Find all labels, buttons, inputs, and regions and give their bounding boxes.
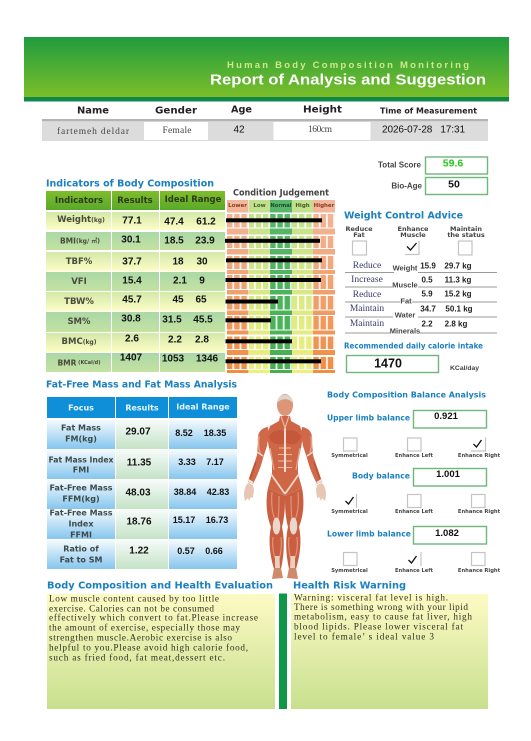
table: indicators of body composition: BMR (KCal/d) (57, 358, 101, 368)
table: fat-free mass and fat mass analysis: 38.84 (174, 487, 196, 497)
patient information table: Time of Measurement (380, 106, 477, 116)
recommended daily calorie intake (344, 342, 483, 372)
table: fat-free mass and fat mass analysis: Results (125, 404, 159, 412)
weight control targets: 15.2 kg (444, 290, 472, 298)
balance: upper limb: Enhance Left (395, 453, 434, 459)
table: indicators of body composition: 1407 (120, 352, 143, 364)
table: fat-free mass and fat mass analysis: 16.73 (206, 515, 228, 525)
weight control options: Fat (353, 231, 365, 239)
patient information table: 160cm (308, 125, 333, 135)
chart: condition judgement bars: Higher (314, 203, 335, 209)
table: indicators of body composition: 2.8 (195, 334, 209, 346)
table: fat-free mass and fat mass analysis: 29.07 (125, 426, 151, 438)
table: indicators of body composition: 45.7 (122, 294, 142, 306)
table: indicators of body composition: 18.5 (164, 236, 184, 246)
table: indicators of body composition: 2.1 (173, 276, 187, 286)
patient information table: fartemeh deldar (57, 126, 130, 137)
table: fat-free mass and fat mass analysis: 0.66 (205, 546, 223, 556)
balance: upper limb: 0.921 (434, 411, 459, 422)
table: indicators of body composition: BMC(kg) (62, 337, 97, 347)
panel: body composition evaluation text: the amount of exercise, especially those may (49, 622, 240, 632)
chart: condition judgement bars: Low (253, 203, 266, 209)
balance: lower limb: Lower limb balance (327, 530, 411, 538)
chart: condition judgement bars: Normal (270, 203, 292, 209)
table: indicators of body composition: 65 (195, 294, 207, 306)
table: fat-free mass and fat mass analysis: 18.76 (126, 516, 152, 528)
table: indicators of body composition: 1053 (162, 354, 185, 364)
patient information table: Gender (155, 106, 197, 116)
table: indicators of body composition: Weight(kg) (57, 215, 105, 225)
heading: indicators of body composition: Indicators of Body Composition (46, 178, 214, 190)
panel: health risk warning text: Warning: visceral fat level is high. (294, 592, 448, 602)
balance: lower limb (327, 526, 501, 574)
recommended daily calorie intake: Recommended daily calorie intake (344, 342, 483, 350)
table: indicators of body composition: 45 (172, 294, 184, 306)
table: fat-free mass and fat mass analysis: 15.17 (173, 515, 195, 525)
patient information table (42, 104, 488, 141)
panel: body composition evaluation text: strengthen muscle.Aerobic exercise is also (49, 632, 232, 642)
panel: body composition evaluation text: exercise. Calories can not be consumed (49, 604, 214, 614)
balance: lower limb: 1.082 (435, 528, 459, 539)
recommended daily calorie intake: KCal/day (450, 365, 479, 372)
table: indicators of body composition: 18 (172, 256, 184, 268)
table: indicators of body composition: 47.4 (164, 216, 184, 228)
table: indicators of body composition (46, 191, 225, 372)
table: fat-free mass and fat mass analysis: Ideal Range (176, 402, 230, 412)
balance: upper limb (327, 410, 501, 459)
table: fat-free mass and fat mass analysis: Focus (68, 404, 94, 412)
weight control targets: 50.1 kg (445, 304, 473, 314)
table: fat-free mass and fat mass analysis: 48.03 (125, 488, 151, 498)
table: indicators of body composition: 77.1 (122, 216, 142, 226)
balance: lower limb: Symmetrical (331, 568, 368, 574)
patient information table: Name (77, 106, 109, 116)
panel: body composition evaluation text: Low muscle content caused by too little (49, 594, 219, 604)
patient information table: 2026-07-28 17:31 (382, 124, 465, 136)
table: fat-free mass and fat mass analysis: FMI (73, 466, 89, 474)
table: fat-free mass and fat mass analysis: Fat Mass (61, 424, 101, 432)
table: fat-free mass and fat mass analysis: 0.57 (177, 546, 195, 556)
total score and bio-age: 59.6 (443, 158, 463, 170)
balance: lower limb: Enhance Right (458, 568, 501, 574)
table: fat-free mass and fat mass analysis: 18.35 (204, 428, 226, 438)
weight control targets: 2.2 (421, 320, 433, 328)
panel: health risk warning text: level to female’ s ideal value 3 (294, 632, 434, 642)
table: fat-free mass and fat mass analysis: Index (69, 520, 94, 528)
chart: condition judgement bars (225, 200, 335, 373)
weight control targets: Weight (393, 264, 418, 272)
table: indicators of body composition: Ideal Range (165, 195, 222, 205)
weight control options: the status (447, 231, 485, 239)
patient information table: Age (231, 104, 252, 116)
table: indicators of body composition: 30.8 (121, 314, 141, 324)
table: fat-free mass and fat mass analysis: Fat-Free Mass (50, 508, 113, 518)
table: fat-free mass and fat mass analysis: 3.33 (178, 457, 196, 467)
table: indicators of body composition: 2.6 (125, 334, 139, 344)
weight control options (346, 225, 485, 255)
table: indicators of body composition: 31.5 (162, 314, 182, 326)
patient information table: 42 (233, 124, 245, 136)
total score and bio-age: Bio-Age (391, 182, 423, 190)
weight control targets: Reduce (353, 290, 381, 300)
balance: body: Enhance Left (395, 509, 434, 515)
table: indicators of body composition: Indicators (55, 196, 103, 206)
table: indicators of body composition: 23.9 (195, 236, 215, 246)
table: fat-free mass and fat mass analysis (47, 397, 237, 569)
table: indicators of body composition: 37.7 (122, 256, 142, 268)
balance: body: Body balance (352, 472, 410, 480)
table: indicators of body composition: 45.5 (193, 314, 213, 326)
table: fat-free mass and fat mass analysis: FFM(kg) (62, 494, 100, 504)
table: indicators of body composition: 9 (199, 276, 205, 286)
panel: body composition evaluation text (47, 594, 275, 709)
header banner (24, 37, 509, 102)
weight control options: Maintain (450, 225, 482, 233)
table: indicators of body composition: 61.2 (196, 216, 216, 228)
patient information table: Height (303, 104, 342, 116)
panel: body composition evaluation text: helpful to you.Please avoid high calorie food, (49, 642, 248, 652)
weight control targets: Maintain (350, 319, 384, 329)
table: indicators of body composition: 1346 (196, 354, 219, 364)
table: indicators of body composition: BMI(kg/ ㎡) (60, 236, 100, 246)
table: fat-free mass and fat mass analysis: 42.83 (207, 487, 229, 497)
table: fat-free mass and fat mass analysis: Fat to SM (60, 556, 102, 564)
panel: body composition evaluation text: effectively which convert to fat.Please increase (49, 612, 258, 622)
balance: body (331, 468, 501, 515)
weight control options: Reduce (346, 225, 373, 233)
balance: lower limb: Enhance Left (395, 568, 434, 574)
heading: condition judgement: Condition Judgement (233, 188, 329, 198)
panel: health risk warning text: metabolism, easy to cause fat liver, high (294, 612, 472, 622)
table: fat-free mass and fat mass analysis: 1.22 (129, 546, 149, 556)
illustration: human muscular figure (244, 394, 326, 579)
weight control targets: Maintain (350, 304, 384, 314)
heading: body composition balance analysis: Body Composition Balance Analysis (327, 390, 486, 400)
weight control targets: 29.7 kg (444, 262, 472, 270)
table: indicators of body composition: 30 (196, 256, 208, 268)
panel: health risk warning text: blood lipids. Please lower visceral fat (294, 622, 463, 632)
heading: fat-free mass and fat mass analysis: Fat-Free Mass and Fat Mass Analysis (46, 380, 237, 390)
table: indicators of body composition: TBW% (64, 297, 94, 307)
weight control targets: Minerals (390, 326, 420, 336)
weight control targets (345, 261, 497, 336)
weight control targets: Reduce (353, 261, 381, 271)
weight control targets: Water (395, 310, 415, 320)
chart: condition judgement bars: Lower (228, 203, 247, 209)
panel: health risk warning text: There is something wrong with your lipid (294, 602, 468, 612)
panel: health risk warning text (291, 592, 488, 709)
table: indicators of body composition: 2.2 (168, 334, 182, 346)
weight control targets: 15.9 (420, 262, 436, 270)
banner subtitle: Human Body Composition Monitoring (227, 60, 469, 71)
divider bar (279, 594, 287, 709)
weight control targets: 5.9 (421, 290, 433, 298)
table: indicators of body composition: 30.1 (121, 234, 141, 246)
table: fat-free mass and fat mass analysis: FFMI (70, 530, 92, 540)
panel: body composition evaluation text: such as fried food, fat meat,dessert etc. (49, 652, 225, 662)
table: fat-free mass and fat mass analysis: 11.35 (127, 458, 152, 468)
heading: health risk warning: Health Risk Warning (293, 580, 406, 592)
total score and bio-age (378, 157, 488, 194)
table: fat-free mass and fat mass analysis: 8.52 (175, 428, 193, 438)
recommended daily calorie intake: 1470 (374, 356, 402, 370)
total score and bio-age: 50 (448, 178, 460, 190)
weight control targets: 2.8 kg (445, 320, 467, 328)
weight control targets: 0.5 (421, 276, 433, 284)
balance: body: Symmetrical (331, 509, 368, 515)
weight control targets: Muscle (392, 280, 418, 290)
table: indicators of body composition: 15.4 (122, 276, 142, 286)
balance: upper limb: Symmetrical (331, 453, 368, 459)
weight control options: Enhance (398, 225, 429, 233)
table: indicators of body composition: TBF% (66, 257, 93, 267)
table: fat-free mass and fat mass analysis: Fat Mass Index (48, 456, 114, 464)
banner title: Report of Analysis and Suggestion (210, 72, 486, 88)
balance: upper limb: Upper limb balance (327, 414, 410, 422)
table: fat-free mass and fat mass analysis: Fat-Free Mass (50, 484, 113, 492)
table: indicators of body composition: SM% (67, 317, 91, 327)
heading: weight control advice: Weight Control Advice (344, 210, 463, 222)
chart: condition judgement bars: High (295, 203, 310, 209)
table: fat-free mass and fat mass analysis: Ratio of (63, 544, 99, 554)
weight control options: Muscle (400, 231, 426, 239)
weight control targets: Increase (351, 275, 383, 285)
table: fat-free mass and fat mass analysis: FM(kg) (65, 434, 97, 444)
heading: body composition and health evaluation: Body Composition and Health Evaluation (47, 580, 273, 592)
balance: body: 1.001 (436, 469, 461, 480)
weight control targets: Fat (400, 296, 412, 306)
table: indicators of body composition: Results (117, 196, 153, 206)
total score and bio-age: Total Score (378, 160, 422, 170)
table: fat-free mass and fat mass analysis: 7.17 (206, 457, 224, 467)
weight control targets: 34.7 (420, 304, 436, 314)
balance: body: Enhance Right (458, 509, 501, 515)
patient information table: Female (162, 126, 192, 136)
weight control targets: 11.3 kg (445, 276, 471, 284)
balance: upper limb: Enhance Right (458, 453, 501, 459)
table: indicators of body composition: VFI (71, 277, 87, 287)
